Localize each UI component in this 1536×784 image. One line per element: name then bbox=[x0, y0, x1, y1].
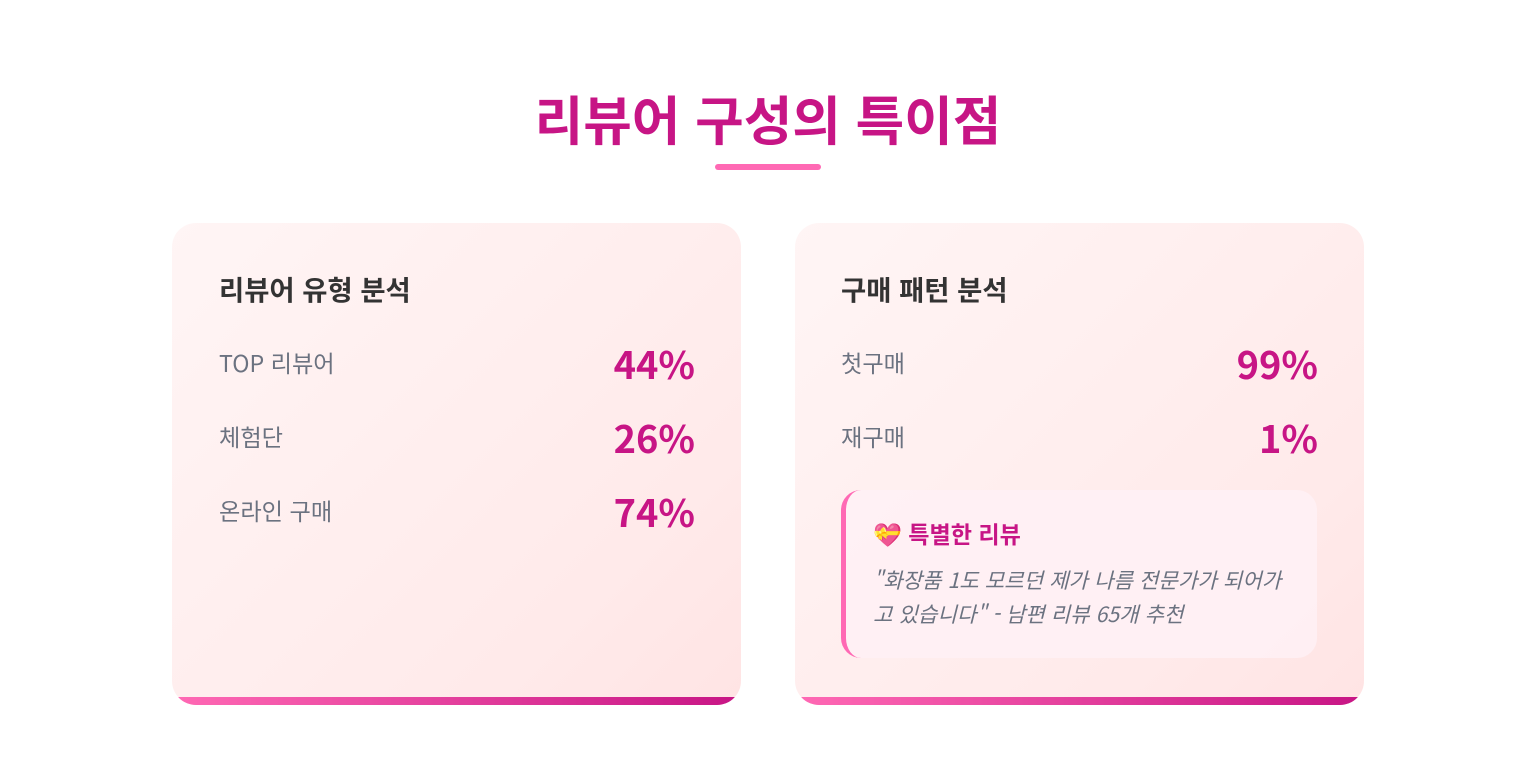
panel: purchase pattern analysis bbox=[795, 223, 1364, 705]
title: 리뷰어 구성의 특이점 bbox=[535, 80, 1001, 156]
panel bottom gradient bar bbox=[172, 697, 741, 705]
stat row: repurchase: 재구매 bbox=[841, 419, 905, 453]
stat row: repurchase: 1% bbox=[1259, 409, 1318, 464]
panel heading: purchase patterns: 구매 패턴 분석 bbox=[841, 268, 1008, 308]
callout heading with heart icon: 💝 특별한 리뷰 bbox=[873, 516, 1021, 550]
stat row: online purchase: 74% bbox=[614, 483, 695, 538]
callout: special review bbox=[841, 490, 1317, 658]
panel: reviewer type analysis bbox=[172, 223, 741, 705]
stat row: first purchase: 99% bbox=[1237, 335, 1318, 390]
stat row: experience group bbox=[219, 409, 695, 464]
stat row: TOP reviewers: TOP 리뷰어 bbox=[219, 345, 335, 379]
stat row: first purchase: 첫구매 bbox=[841, 345, 905, 379]
panel bottom gradient bar bbox=[795, 697, 1364, 705]
stat row: online purchase: 온라인 구매 bbox=[219, 493, 332, 527]
stat row: TOP reviewers: 44% bbox=[614, 335, 695, 390]
stat row: TOP reviewers bbox=[219, 335, 695, 390]
stat row: experience group: 26% bbox=[614, 409, 695, 464]
panel heading: reviewer types: 리뷰어 유형 분석 bbox=[219, 268, 411, 308]
stat row: online purchase bbox=[219, 483, 695, 538]
callout quote bbox=[873, 564, 1283, 629]
callout quote: 고 있습니다" - 남편 리뷰 65개 추천 bbox=[873, 598, 1183, 629]
callout quote: "화장품 1도 모르던 제가 나름 전문가가 되어가 bbox=[873, 564, 1281, 595]
stat row: experience group: 체험단 bbox=[219, 419, 283, 453]
stat row: repurchase bbox=[841, 409, 1318, 464]
stat row: first purchase bbox=[841, 335, 1318, 390]
title underline bbox=[715, 164, 821, 170]
